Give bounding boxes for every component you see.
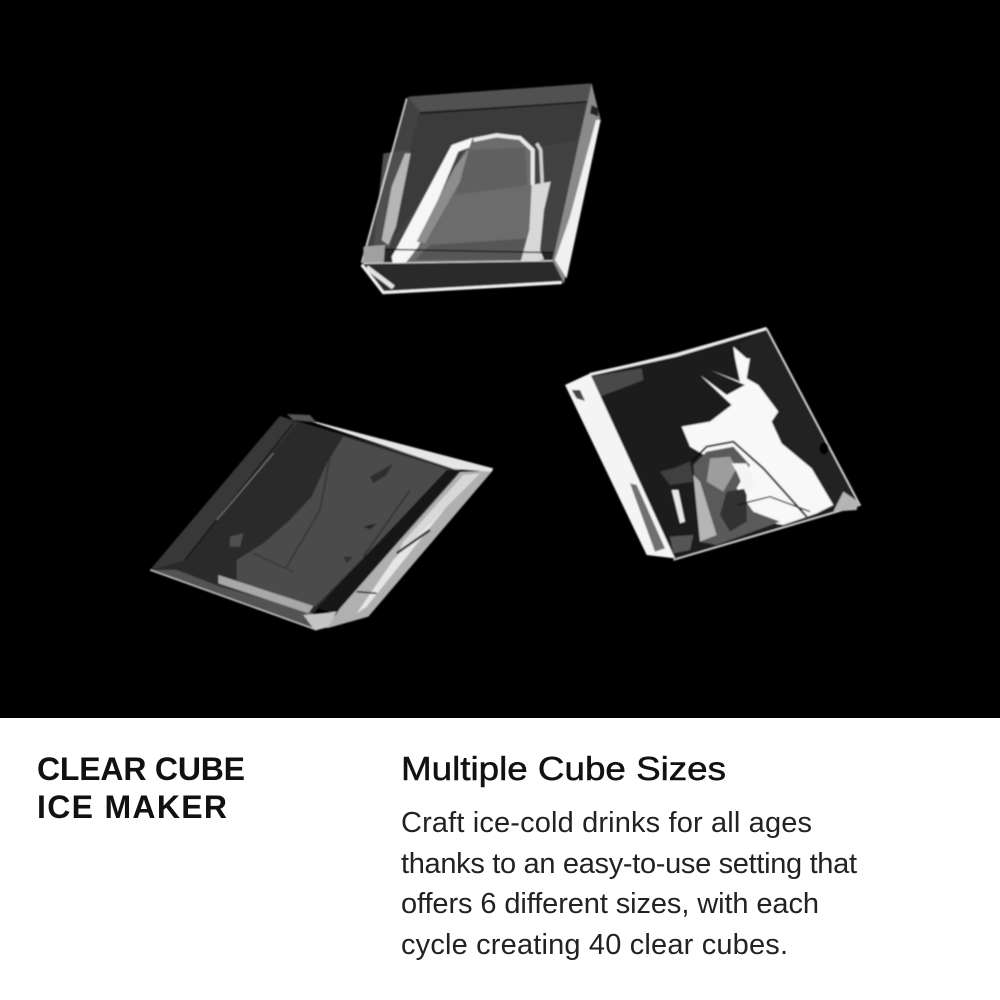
top white edge	[287, 414, 493, 472]
right edge	[553, 83, 601, 283]
feature description: cycle creating 40 clear cubes.	[401, 929, 788, 961]
bottom edge	[150, 570, 330, 630]
white text panel	[0, 718, 1000, 1000]
title: ICE MAKER	[37, 789, 227, 825]
bottom edge	[362, 261, 564, 294]
ice cube: top	[362, 83, 601, 294]
feature description: Craft ice-cold drinks for all ages	[401, 807, 812, 839]
right face	[327, 471, 493, 628]
photo panel background	[0, 0, 1000, 718]
feature heading: Multiple Cube Sizes	[401, 750, 726, 787]
arch	[395, 135, 534, 267]
top and side edges	[590, 328, 767, 374]
arch inside	[693, 447, 780, 545]
ice cube: right	[565, 328, 860, 560]
ice cube: left	[150, 414, 493, 631]
title	[37, 751, 245, 825]
feature description	[401, 807, 857, 961]
title: CLEAR CUBE	[37, 751, 245, 787]
feature description: offers 6 different sizes, with each	[401, 888, 819, 920]
feature description: thanks to an easy-to-use setting that	[401, 848, 857, 880]
left edge	[565, 373, 675, 558]
white reflection	[682, 347, 833, 525]
dark inner strip near right	[317, 470, 460, 613]
